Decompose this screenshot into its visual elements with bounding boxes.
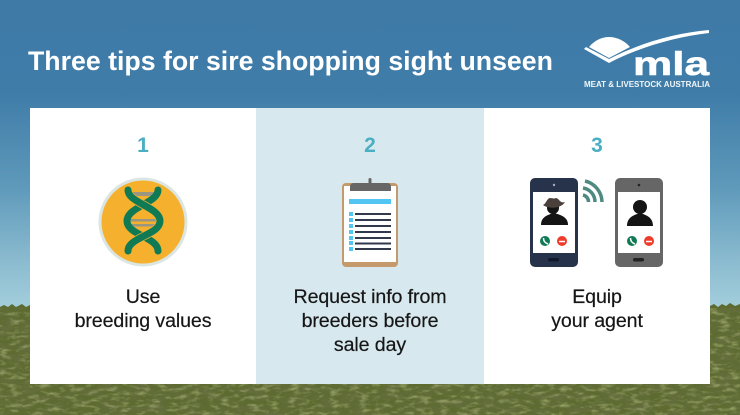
icon: clipboard: [342, 178, 398, 267]
logo dome: [589, 37, 630, 58]
tip 1 number: 1: [137, 134, 149, 157]
logo strapline: MEAT & LIVESTOCK AUSTRALIA: [584, 80, 710, 89]
tip 2 label: Request info from: [294, 286, 446, 308]
logo wordmark: mla: [633, 45, 710, 82]
icon: two phones with signal: [530, 178, 663, 267]
tip 1 label: Use: [126, 286, 160, 308]
tip 3 label: Equip: [572, 286, 622, 308]
tip 1 label: [75, 286, 211, 332]
panel: tip 2: [256, 108, 484, 384]
panel: tip 1: [30, 108, 256, 384]
panel: tip 3: [484, 108, 710, 384]
tip 2 label: sale day: [334, 334, 406, 356]
tip 2 number: 2: [364, 134, 376, 157]
tip 3 label: [551, 286, 643, 332]
tip 1 label: breeding values: [75, 310, 211, 332]
icon: DNA helix: [98, 178, 188, 266]
tip 2 label: breeders before: [302, 310, 438, 332]
logo swoosh: [584, 30, 709, 63]
logo: Meat & Livestock Australia: [584, 30, 710, 89]
title: Three tips for sire shopping sight unseen: [28, 46, 553, 76]
tip 3 number: 3: [591, 134, 603, 157]
tip 3 label: your agent: [551, 310, 643, 332]
tip 2 label: [294, 286, 446, 356]
